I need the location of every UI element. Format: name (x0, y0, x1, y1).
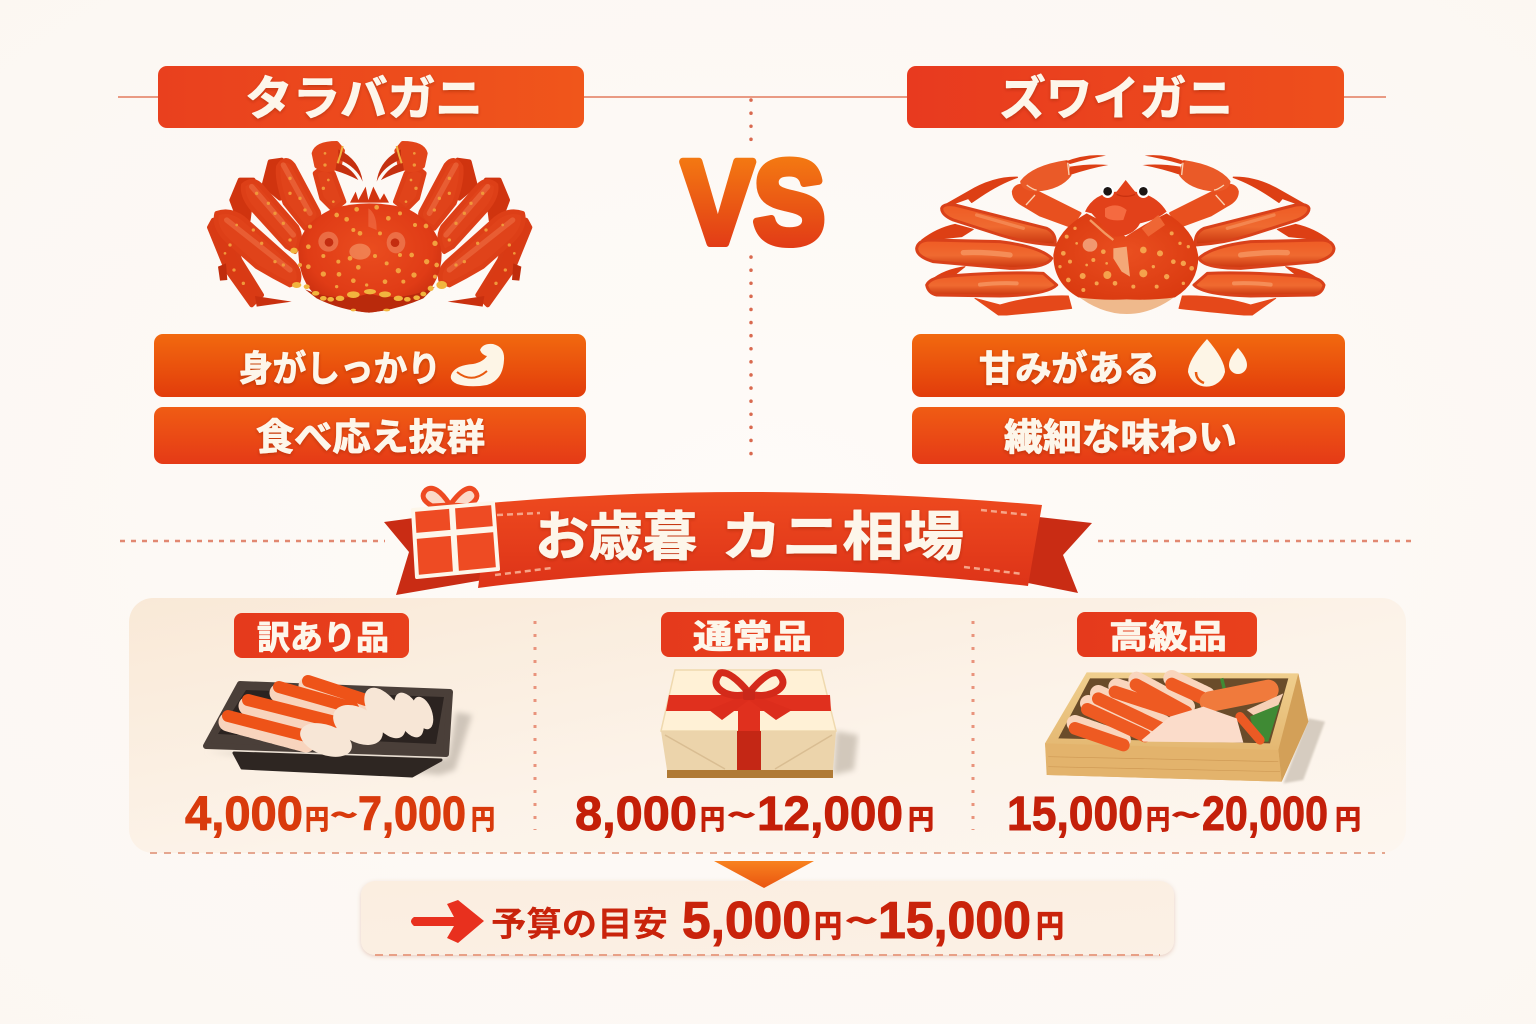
budget amount: 5,000 (682, 892, 811, 950)
ribbon banner: price heading (384, 488, 1092, 595)
label: premium (1077, 610, 1257, 658)
tier dividers (535, 621, 973, 830)
price: seconds: 円 (305, 798, 329, 837)
price: premium: 15,000 (1007, 788, 1143, 841)
arrow: down triangle to budget (714, 861, 814, 888)
illustration: king crab (209, 143, 530, 313)
centre dotted divider (749, 100, 753, 460)
icon: gift box (413, 488, 498, 577)
label: premium: 高級品 (1109, 610, 1227, 658)
feature bar: delicate flavour (912, 407, 1345, 464)
feature bar: firm meat (154, 334, 586, 397)
price: premium (1007, 788, 1361, 841)
top connecting line (118, 96, 1386, 98)
section side dotted lines (120, 540, 1416, 542)
price: regular: 円 (700, 798, 725, 837)
label: regular: 通常品 (693, 610, 812, 658)
ribbon left tail (384, 508, 488, 595)
price: premium: 20,000 (1202, 788, 1328, 841)
price: premium: ~ (1171, 791, 1201, 835)
price: seconds: ~ (330, 791, 358, 835)
panel: king crab heading: タラバガニ (245, 60, 483, 129)
feature bar: delicate flavour: 繊細な味わい (1004, 407, 1237, 461)
illustration: snow crab (917, 155, 1334, 315)
budget amount: 円 (814, 901, 842, 946)
price: regular: 8,000 (575, 788, 697, 841)
feature bar: firm meat: 身がしっかり (239, 340, 441, 392)
price: seconds (185, 788, 495, 841)
price: seconds: 4,000 (185, 788, 303, 841)
price: regular: 円 (908, 798, 934, 837)
label: regular (661, 610, 844, 658)
icon: flexed arm (451, 344, 504, 386)
icon: water drops (1188, 339, 1247, 387)
price: regular (575, 788, 934, 841)
price: premium: 円 (1146, 798, 1170, 837)
budget amount (682, 892, 1064, 950)
price: seconds: 円 (471, 798, 495, 837)
illustration: gift box (661, 670, 858, 778)
panel: snow crab heading (907, 60, 1344, 129)
price: seconds: 7,000 (358, 788, 466, 841)
feature bar: satisfying (154, 407, 586, 464)
label: seconds: 訳あり品 (257, 611, 389, 659)
budget amount: ~ (845, 894, 878, 943)
arrow: pointing to budget (411, 900, 484, 943)
illustration: wooden premium box (1045, 672, 1325, 783)
banner title: カニ相場 (721, 495, 964, 571)
banner title (535, 495, 964, 571)
feature bar: satisfying: 食べ応え抜群 (256, 407, 485, 461)
price: regular: 12,000 (757, 788, 903, 841)
ribbon stitching (495, 510, 1028, 575)
ribbon main (478, 492, 1042, 588)
feature bar: sweetness (912, 334, 1345, 397)
panel: price tiers (129, 598, 1406, 853)
VS mark: VS (682, 137, 825, 269)
ribbon right tail (1028, 516, 1092, 593)
banner title: お歳暮 (535, 495, 697, 571)
budget label: 予算の目安 (491, 897, 668, 946)
price: regular: ~ (727, 791, 756, 835)
feature bar: sweetness: 甘みがある (979, 340, 1160, 392)
panel: king crab heading (158, 60, 584, 129)
panel: snow crab heading: ズワイガニ (999, 60, 1233, 129)
price: premium: 円 (1335, 798, 1361, 837)
illustration: black tray with crab (206, 681, 472, 776)
budget amount: 15,000 (878, 892, 1031, 950)
budget amount: 円 (1036, 901, 1064, 946)
panel: budget guide (361, 881, 1174, 955)
